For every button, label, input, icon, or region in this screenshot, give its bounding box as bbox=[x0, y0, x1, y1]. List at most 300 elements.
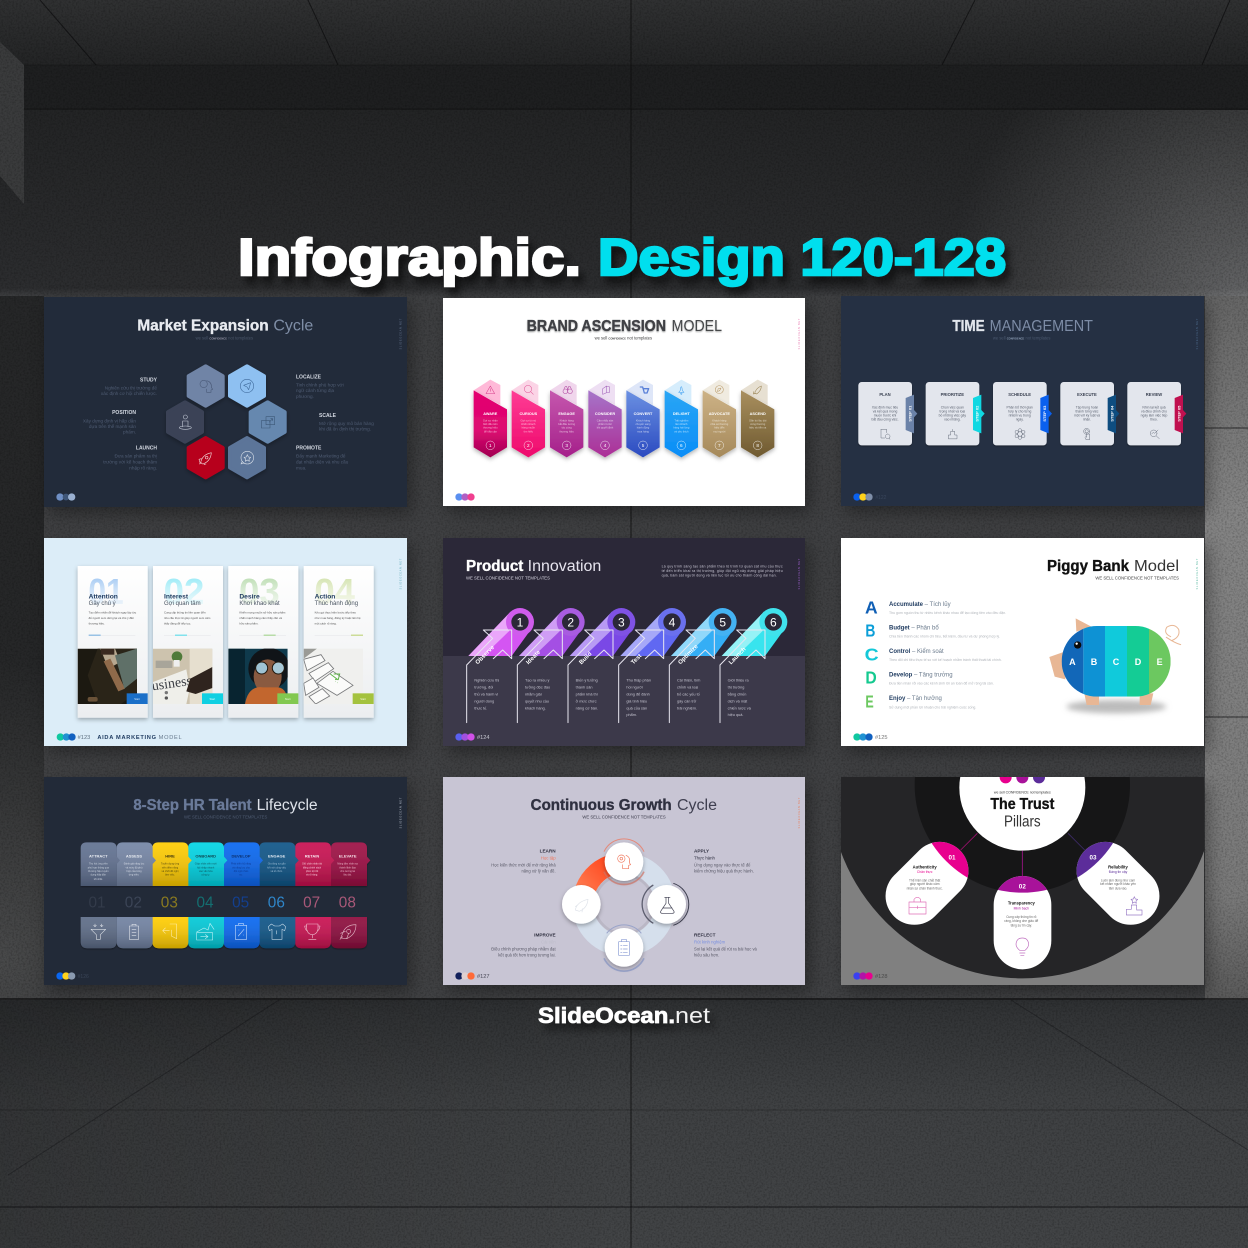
step numbers bbox=[88, 894, 356, 911]
card 03 desire: Desire bbox=[239, 594, 260, 601]
step 6 launch bbox=[720, 608, 787, 723]
step labels and numbers: Cân nhắc sản bbox=[597, 417, 614, 422]
heading bbox=[133, 797, 318, 820]
step labels and numbers: Trải nghiệm bbox=[674, 418, 689, 422]
footer brand: net bbox=[675, 1003, 710, 1028]
label: scale: SCALE bbox=[319, 413, 337, 419]
step descriptions: sự. bbox=[239, 874, 243, 877]
card schedule: STEP 03 bbox=[1042, 405, 1047, 422]
intro paragraph: Là quy trình sáng tạo sản phẩm theo lộ trình từ quan sát nhu cầu thực bbox=[662, 565, 783, 569]
label: launch: trường với kế hoạch thâm bbox=[103, 459, 157, 464]
card 04 action: Action bbox=[315, 594, 335, 601]
step 2 ideate bbox=[517, 608, 585, 723]
step descriptions: phù hợp thông qua bbox=[88, 866, 109, 869]
step 1 observe: thủ và hành vi bbox=[474, 692, 498, 696]
step labels and numbers: 8 bbox=[756, 443, 759, 448]
heading: we sell CONFIDENCE not templates bbox=[994, 790, 1051, 794]
bottom icons bbox=[91, 923, 356, 940]
label: study: Nghiên cứu thị trường để bbox=[105, 384, 157, 390]
step labels and numbers: thương hiệu bbox=[483, 426, 498, 430]
card schedule: ngày. bbox=[1016, 418, 1024, 422]
step 6 launch: bằng chiến bbox=[728, 691, 746, 696]
piggy illustration: E bbox=[1157, 657, 1163, 667]
heading: WE SELL CONFIDENCE NOT TEMPLATES bbox=[582, 815, 666, 820]
card 01 attention bbox=[78, 566, 148, 718]
pillar 01 authenticity: Thể hiện sản chất thật bbox=[909, 878, 940, 882]
slide nav dots bbox=[455, 493, 475, 501]
label: learn: năng xử lý vấn đề. bbox=[521, 868, 556, 873]
heading: MANAGEMENT bbox=[990, 318, 1094, 335]
heading: Market Expansion bbox=[137, 318, 269, 335]
pillar 01 authenticity: giúp người khác cảm bbox=[910, 882, 940, 886]
pillar 02 transparency: 02 bbox=[1019, 884, 1026, 891]
intro paragraph: tế đến triển khai ra thị trường, giúp đội ngũ xây dựng giải pháp hiệu bbox=[662, 569, 783, 573]
heading bbox=[137, 318, 313, 341]
step descriptions: làm việc. bbox=[165, 874, 175, 877]
item D: Develop – Tăng trưởng bbox=[889, 672, 953, 679]
step labels and numbers: 6 bbox=[680, 443, 683, 448]
item D: Đưa tiền nhàn rỗi vào các kênh sinh lời an toàn để mở rộng tài sản. bbox=[889, 681, 994, 686]
label: improve bbox=[491, 932, 557, 957]
card review: ngày làm việc tiếp bbox=[1141, 414, 1167, 418]
step 6 launch: 6 bbox=[770, 615, 777, 629]
panel: Market Expansion Cycle: SLIDEOCEAN.NET bbox=[400, 318, 403, 349]
step numbers: 08 bbox=[339, 894, 356, 911]
cycle node arcs bbox=[604, 839, 689, 971]
step descriptions: hợp của từng bbox=[126, 870, 142, 873]
label: apply: Thực hành bbox=[694, 856, 716, 861]
card plan bbox=[858, 382, 917, 445]
label: position: dựa trên thế mạnh sản bbox=[89, 424, 136, 429]
pillar 02 transparency: Minh bạch bbox=[1014, 906, 1029, 910]
step descriptions: Giúp nhân viên mới bbox=[195, 863, 217, 866]
card 02 interest: thấy đáng để tiếp tục. bbox=[164, 621, 191, 625]
card plan: muốn trước khi bbox=[874, 414, 897, 418]
slide nav dots: #125 bbox=[875, 735, 888, 741]
step 5 optimize: gây cản trở bbox=[677, 699, 697, 703]
label: learn bbox=[491, 849, 556, 873]
footer label: MODEL bbox=[159, 735, 182, 741]
heading: MODEL bbox=[672, 318, 722, 335]
step numbers: 01 bbox=[88, 894, 106, 911]
label: learn: Học kiến thức mới để mở rộng khả bbox=[491, 863, 556, 868]
step 3 build: phẩm khả thi bbox=[576, 692, 598, 696]
item D bbox=[865, 668, 994, 688]
step labels and numbers: hiệu đến bbox=[714, 426, 725, 430]
step 5 optimize: bỏ các yếu tố bbox=[677, 692, 701, 696]
title bbox=[238, 229, 1006, 287]
label: promote: PROMOTE bbox=[296, 446, 322, 452]
label: promote: Đẩy mạnh Marketing để bbox=[296, 453, 346, 459]
card 01 attention: thương hiệu. bbox=[89, 621, 105, 625]
card review bbox=[1127, 382, 1186, 445]
card 03 desire: hữu sản phẩm. bbox=[239, 621, 259, 625]
step descriptions: Giữ chân nhân tài bbox=[302, 863, 322, 866]
step labels and numbers: Khách hàng bbox=[560, 418, 574, 422]
card schedule: Phân bổ thời gian bbox=[1007, 406, 1033, 410]
step icons bbox=[486, 385, 761, 394]
item E: Enjoy – Tận hưởng bbox=[889, 695, 942, 702]
step titles: DEVELOP bbox=[231, 853, 251, 858]
step labels and numbers: khi quyết định bbox=[597, 426, 614, 430]
slide nav dots: #124 bbox=[477, 735, 490, 741]
heading: Continuous Growth bbox=[531, 797, 672, 814]
step descriptions: dụng hấp dẫn bbox=[91, 874, 107, 877]
piggy illustration: D bbox=[1135, 657, 1142, 667]
step 1 observe: thực tế. bbox=[474, 706, 487, 710]
card review: Nhìn lại kết quả bbox=[1142, 406, 1166, 410]
step 6 launch: thị trường bbox=[728, 685, 744, 689]
cycle icons bbox=[575, 855, 674, 955]
card 04 action: Thúc hành động bbox=[315, 601, 358, 607]
step 6 launch: Launch bbox=[728, 647, 748, 666]
card 03 desire: Start bbox=[285, 697, 291, 701]
heading: Lifecycle bbox=[257, 797, 318, 814]
step descriptions: ứng viên. bbox=[129, 874, 140, 877]
item C: C bbox=[865, 644, 879, 664]
step descriptions: công ty. bbox=[201, 874, 210, 877]
label: localize: LOCALIZE bbox=[296, 374, 322, 380]
card 03 desire bbox=[228, 566, 298, 718]
step descriptions: Phát triển kỹ năng bbox=[231, 863, 252, 866]
card 04 action bbox=[304, 566, 374, 718]
step descriptions: và tổ chức. bbox=[270, 870, 283, 873]
item D: D bbox=[865, 668, 877, 688]
step numbers: 02 bbox=[125, 894, 142, 911]
heading: BRAND ASCENSION bbox=[527, 318, 666, 335]
card plan: và kết quả mong bbox=[873, 410, 897, 414]
step labels and numbers: hành động bbox=[637, 426, 650, 430]
card schedule: hợp lý cho từng bbox=[1008, 410, 1031, 414]
footer label: #123 bbox=[78, 735, 90, 741]
step descriptions: lâu dài. bbox=[344, 874, 352, 877]
label: apply: kiểm chứng hiệu quả thực hành. bbox=[694, 868, 754, 873]
item E bbox=[865, 691, 976, 711]
step labels and numbers: hiệu và tiến xa bbox=[749, 426, 767, 430]
step titles: ASSESS bbox=[126, 853, 142, 858]
step labels and numbers: chia sẻ thương bbox=[710, 422, 729, 426]
step descriptions: và mức độ phù bbox=[126, 866, 143, 869]
label: study: xác định cơ hội chiến lược. bbox=[101, 391, 157, 396]
step descriptions: và rõ ràng. bbox=[306, 874, 318, 877]
step labels and numbers: CONVERT bbox=[634, 412, 653, 416]
label: scale: Mở rộng quy mô bán hàng bbox=[319, 420, 374, 426]
step descriptions: Đánh giá năng lực bbox=[124, 863, 145, 866]
step shapes bbox=[474, 390, 774, 457]
card 04 action: như mua hàng, đăng ký hoặc liên hệ bbox=[315, 616, 361, 620]
label: launch: LAUNCH bbox=[136, 446, 157, 452]
heading: WE SELL CONFIDENCE NOT TEMPLATES bbox=[184, 815, 267, 820]
footer brand: SlideOcean. bbox=[538, 1003, 675, 1028]
step labels and numbers: tác cùng bbox=[562, 426, 572, 430]
step 2 ideate: quyết nhu cầu bbox=[525, 699, 549, 703]
step descriptions: đội ngũ nhân bbox=[234, 870, 249, 873]
piggy illustration bbox=[1049, 618, 1181, 713]
pillar 03 reliability: Luôn làm đúng như cam bbox=[1101, 878, 1135, 882]
intro paragraph: quả, bám sát người dùng và liên tục tối ưu cho thành công dài hạn. bbox=[662, 573, 777, 577]
slide nav dots bbox=[56, 493, 75, 501]
label: improve: Cải tiến bbox=[541, 939, 556, 944]
step 4 test bbox=[619, 608, 686, 723]
heading: The Trust bbox=[990, 796, 1054, 813]
slide nav dots: #128 bbox=[875, 974, 888, 980]
label: apply: Ứng dụng ngay vào thực tế để bbox=[694, 863, 751, 868]
step labels and numbers: và yêu thích bbox=[674, 429, 689, 433]
card 04 action: 04 bbox=[314, 571, 355, 612]
label: position: phẩm. bbox=[123, 429, 136, 435]
step numbers: 06 bbox=[268, 894, 285, 911]
pillar 02 transparency: Transparency bbox=[1008, 901, 1036, 906]
card 02 interest: Cung cấp thông tin liên quan đến bbox=[164, 611, 206, 615]
heading bbox=[952, 318, 1094, 341]
card prioritize: bỏ những việc gây bbox=[939, 414, 966, 418]
slide nav dots bbox=[853, 493, 887, 501]
heading: Piggy Bank bbox=[1047, 558, 1129, 575]
top step blocks bbox=[81, 842, 370, 886]
step descriptions: vào văn hóa bbox=[199, 870, 213, 873]
item B: B bbox=[865, 621, 875, 641]
label: learn: Học tập bbox=[541, 856, 556, 861]
step titles: ONBOARD bbox=[195, 853, 216, 858]
step 1 observe: người dùng bbox=[474, 699, 494, 703]
step 2 ideate: 2 bbox=[567, 615, 574, 629]
label: scale bbox=[319, 413, 374, 432]
label: position bbox=[83, 410, 136, 435]
panel: Brand Ascension Model: SLIDEOCEAN.NET bbox=[798, 318, 801, 349]
step 6 launch: dịch và mặt bbox=[728, 699, 748, 703]
card execute: thành từng việc bbox=[1076, 410, 1099, 414]
step 1 observe: 1 bbox=[517, 615, 524, 629]
step titles: HIRE bbox=[165, 853, 175, 858]
card review: theo. bbox=[1150, 418, 1158, 422]
label: localize: phương. bbox=[296, 394, 314, 399]
step labels and numbers: Gắn bó lâu dài bbox=[749, 417, 767, 422]
step 2 ideate: tưởng độc đáo bbox=[525, 685, 550, 689]
card 03 desire: Khơi khao khát bbox=[239, 601, 280, 607]
step 6 launch: hiệu quả. bbox=[728, 713, 743, 717]
step 6 launch: Giới thiệu ra bbox=[728, 678, 750, 682]
step 4 test: Test bbox=[631, 653, 643, 666]
intro paragraph bbox=[662, 565, 783, 577]
heading: WE SELL CONFIDENCE NOT TEMPLATES bbox=[466, 576, 550, 581]
label: launch: Đưa sản phẩm ra thị bbox=[115, 453, 157, 459]
step numbers: 07 bbox=[303, 894, 320, 911]
step labels and numbers: CURIOUS bbox=[520, 412, 538, 416]
step titles: ATTRACT bbox=[89, 853, 108, 858]
pillar 02 transparency: tăng sự tin cậy. bbox=[1011, 923, 1032, 927]
card prioritize: PRIORITIZE bbox=[941, 392, 964, 397]
item A: Thu gom nguồn thu từ nhiều kênh khác nhau để tạo dòng tiền vào đều đặn. bbox=[889, 611, 1006, 615]
card review: REVIEW bbox=[1146, 392, 1162, 397]
panel: Time Management bbox=[841, 296, 1204, 506]
step 6 launch: chiến lược và bbox=[728, 706, 752, 710]
label: promote: đạt nhận diện và nhu cầu bbox=[296, 459, 349, 464]
item A bbox=[865, 597, 1006, 617]
step descriptions: hội nhập nhanh bbox=[197, 866, 215, 869]
panel: AIDA Marketing Model bbox=[44, 538, 407, 746]
step descriptions: và năng lực cho bbox=[232, 866, 251, 869]
step 3 build: Build bbox=[579, 651, 594, 666]
heading: we sell CONFIDENCE not templates bbox=[993, 336, 1050, 341]
step 1 observe: Observe bbox=[475, 644, 497, 666]
card execute: STEP 04 bbox=[1109, 405, 1114, 422]
step descriptions: Thu hút ứng viên bbox=[89, 863, 108, 866]
step labels and numbers: 7 bbox=[718, 443, 721, 448]
step labels and numbers: ENGAGE bbox=[558, 412, 575, 416]
step 3 build: Biến ý tưởng bbox=[576, 678, 598, 682]
step 5 optimize: chỉnh và loại bbox=[677, 685, 698, 689]
panel: Continuous Growth Cycle bbox=[443, 777, 805, 985]
step descriptions: tốt nhất. bbox=[94, 878, 103, 881]
card execute: nhận. bbox=[1083, 418, 1091, 422]
step 1 observe: trường, đối bbox=[474, 685, 493, 689]
step 4 test: Thu thập phản bbox=[626, 678, 651, 682]
footer label: AIDA MARKETING bbox=[97, 735, 157, 741]
label: position: POSITION bbox=[112, 410, 136, 416]
slide nav dots bbox=[56, 972, 89, 980]
card 01 attention: Gây chú ý bbox=[89, 601, 116, 607]
panel: 8-Step HR Talent Lifecycle bbox=[44, 777, 407, 985]
label: study: STUDY bbox=[140, 377, 158, 383]
card plan: PLAN bbox=[879, 392, 891, 397]
heading bbox=[1047, 558, 1179, 581]
card 01 attention: 01 bbox=[88, 571, 124, 612]
step titles: RETAIN bbox=[305, 853, 319, 858]
card prioritize: trọng nhất và loại bbox=[940, 410, 965, 414]
title: Infographic. bbox=[238, 229, 581, 287]
label: learn: LEARN bbox=[540, 849, 556, 854]
card execute bbox=[1060, 382, 1119, 445]
label: reflect: REFLECT bbox=[694, 932, 716, 937]
label: reflect bbox=[694, 932, 758, 957]
step descriptions bbox=[88, 863, 358, 881]
cycle nodes bbox=[562, 842, 686, 967]
card prioritize: xao nhãng. bbox=[944, 418, 961, 422]
step titles bbox=[89, 853, 357, 858]
step labels and numbers: Khách hàng bbox=[636, 418, 651, 422]
slide nav dots bbox=[853, 733, 888, 741]
heading: TIME bbox=[952, 318, 985, 335]
step numbers: 03 bbox=[161, 894, 178, 911]
title: Design 120-128 bbox=[598, 229, 1006, 287]
step 3 build bbox=[568, 608, 635, 723]
panel: Market Expansion Cycle bbox=[44, 297, 407, 507]
step titles: ELEVATE bbox=[339, 853, 357, 858]
step labels and numbers: hàng hài lòng bbox=[673, 426, 690, 430]
step 4 test: quả của sản bbox=[626, 706, 647, 710]
step labels and numbers: ADVOCATE bbox=[709, 412, 730, 416]
step 4 test: 4 bbox=[669, 615, 676, 629]
panel: Piggy Bank Model bbox=[841, 538, 1204, 746]
step descriptions: bằng chính sách bbox=[303, 866, 322, 869]
bottom icon blocks bbox=[81, 917, 367, 948]
piggy illustration: B bbox=[1091, 657, 1098, 667]
card prioritize: STEP 02 bbox=[975, 405, 980, 422]
step descriptions: thành lãnh đạo bbox=[339, 866, 357, 869]
card 02 interest: Start bbox=[210, 697, 215, 701]
label: launch: nhập rõ ràng. bbox=[129, 465, 157, 470]
step labels and numbers: tìm hiểu bbox=[524, 429, 534, 433]
step descriptions: Gia tăng sự gắn bbox=[268, 863, 286, 866]
step 1 observe bbox=[467, 608, 534, 723]
step descriptions: Nâng tầm nhân sự bbox=[337, 863, 358, 866]
card prioritize bbox=[926, 382, 985, 445]
pillar 02 transparency: ràng, không che giấu để bbox=[1004, 919, 1039, 923]
step descriptions: viên tiềm năng bbox=[162, 866, 179, 869]
card review: STEP 05 bbox=[1176, 405, 1181, 422]
card 01 attention: Tạo điểm nhấn để khách ngay lập tức bbox=[89, 611, 137, 615]
pillar 03 reliability: Reliability bbox=[1108, 865, 1129, 870]
step 2 ideate: Tạo ra nhiều ý bbox=[525, 678, 550, 682]
card prioritize: Chọn việc quan bbox=[941, 406, 964, 410]
card 02 interest: Gợi quan tâm bbox=[164, 601, 201, 607]
step labels and numbers: hàng muốn bbox=[522, 426, 535, 430]
step labels and numbers: làm khách bbox=[675, 422, 688, 426]
card 03 desire: nhấn mạnh hàng cảm thấy cần và bbox=[239, 616, 282, 620]
item A: A bbox=[865, 597, 878, 617]
step 3 build: 3 bbox=[618, 615, 625, 629]
card schedule: SCHEDULE bbox=[1008, 392, 1031, 397]
pillar 02 transparency: Cung cấp thông tin rõ bbox=[1006, 915, 1037, 919]
label: promote: mua. bbox=[296, 465, 306, 470]
heading: WE SELL CONFIDENCE NOT TEMPLATES bbox=[1095, 576, 1179, 581]
step 3 build: năng cơ bản. bbox=[576, 706, 598, 710]
step descriptions: cho tương lai bbox=[340, 870, 355, 873]
card 02 interest: Interest bbox=[164, 594, 189, 601]
step numbers: 05 bbox=[232, 894, 249, 911]
card 01 attention: Start bbox=[134, 697, 140, 701]
card 04 action: Start bbox=[360, 697, 366, 701]
top dots bbox=[1000, 771, 1045, 783]
step 5 optimize: trải nghiệm. bbox=[677, 706, 697, 710]
label: localize bbox=[296, 374, 344, 399]
slide nav dots bbox=[853, 972, 888, 980]
card review: và điều chỉnh cho bbox=[1141, 410, 1167, 414]
step labels and numbers: DELIGHT bbox=[673, 412, 690, 416]
heading: Product bbox=[466, 558, 523, 575]
step labels and numbers: 1 bbox=[489, 443, 492, 448]
card 02 interest bbox=[151, 566, 223, 718]
card 02 interest: nhu cầu thực tế giúp người xem cảm bbox=[164, 616, 211, 620]
card execute: EXECUTE bbox=[1077, 392, 1097, 397]
label: scale: khi đã ổn định thị trường. bbox=[319, 426, 371, 432]
step 5 optimize: Cải thiện, tinh bbox=[677, 678, 700, 682]
card schedule: nhiệm vụ trong bbox=[1009, 414, 1031, 418]
step labels and numbers: 2 bbox=[527, 443, 530, 448]
card 03 desire: 03 bbox=[239, 571, 280, 612]
step 4 test: giá tính hiệu bbox=[626, 699, 647, 703]
step numbers: 04 bbox=[196, 894, 214, 911]
card 04 action: Kêu gọi thực hiện bước tiếp theo bbox=[315, 611, 356, 615]
label: localize: Tinh chỉnh phù hợp với bbox=[296, 381, 344, 387]
step labels and numbers: Khách hàng bbox=[712, 418, 727, 422]
panel: Product Innovation bbox=[443, 538, 805, 746]
item A: Accumulate – Tích lũy bbox=[889, 602, 951, 608]
label: reflect: Rút kinh nghiệm bbox=[694, 939, 726, 944]
panel: Time Management: SLIDEOCEAN.NET bbox=[1196, 318, 1199, 349]
label: apply: APPLY bbox=[694, 849, 710, 854]
pillar 01 authenticity bbox=[886, 842, 968, 925]
step labels and numbers: mọi người bbox=[713, 429, 726, 433]
pillar 02 transparency bbox=[994, 876, 1052, 970]
panel: Brand Ascension Model bbox=[443, 298, 805, 506]
heading bbox=[531, 797, 717, 820]
step labels and numbers: CONSIDER bbox=[595, 412, 615, 416]
step labels and numbers: 3 bbox=[565, 443, 568, 448]
step 5 optimize: Optimize bbox=[678, 643, 700, 666]
step 4 test: hồi người bbox=[626, 685, 643, 689]
item B: Budget – Phân bổ bbox=[889, 625, 939, 632]
